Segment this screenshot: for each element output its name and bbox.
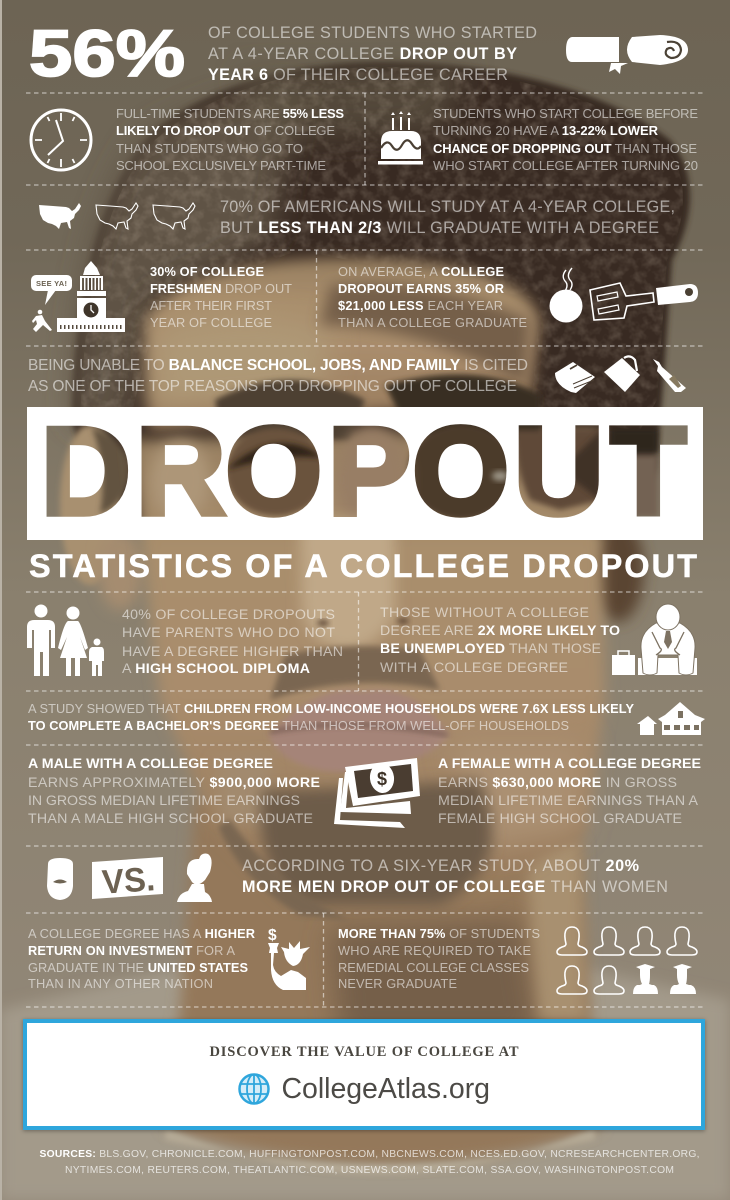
row: clock and cake statistics [31,106,698,173]
text: six-year study [242,857,668,896]
icon: small and large houses [637,702,705,735]
row: US maps and graduation [39,198,675,237]
text: female earnings [438,756,701,827]
text: 56 percent statement: OF COLLEGE STUDENTS WHO STARTED [208,24,537,42]
top block: 56 percent [29,16,688,90]
text: balance statement [28,357,528,395]
runner [38,310,42,314]
icon: statue of liberty with dollar: $ [268,927,277,944]
text: start before twenty: CHANCE OF DROPPING OUT THAN THOSE [433,141,697,156]
icon: eight student figures [557,927,697,994]
text: balance statement: AS ONE OF THE TOP REASONS FOR DROPPING OUT OF COLLEGE [28,378,517,395]
icon: woman with ponytail [177,854,212,902]
left ear [60,425,120,585]
text: male earnings: A MALE WITH A COLLEGE DEGREE [28,756,273,772]
panel: DROPOUT white title with cut-out letters [27,407,703,540]
text: unemployment: BE UNEMPLOYED THAN THOSE [380,641,601,657]
text: start before twenty: TURNING 20 HAVE A 13-22% LOWER [433,123,659,138]
icon: stack of banknotes [334,758,420,828]
row: low-income households [28,701,705,735]
text: thirty percent of freshmen: YEAR OF COLLEGE [150,315,272,330]
icon: birthday cake [378,111,423,164]
icon: burger patty and spatula [550,268,698,322]
icon: clock tower with runner: SEE YA! [36,279,67,288]
hair [72,62,690,540]
text: forty percent parents: HAVE A DEGREE HIGHER THAN [122,644,343,660]
row: balance school, jobs and family [28,356,686,395]
neck [165,800,600,1164]
text: dropout earnings: THAN A COLLEGE GRADUATE [338,315,527,330]
text: unemployment [380,605,620,676]
text: low-income study [28,701,634,733]
text: seventy percent of Americans: BUT LESS THAN 2/3 WILL GRADUATE WITH A DEGREE [220,219,659,237]
text: forty percent parents [122,607,343,677]
text: forty percent parents: 40% OF COLLEGE DROPOUTS [122,607,335,623]
heading: statistics of a college dropout: STATISTICS OF A COLLEGE DROPOUT [29,548,697,584]
row: parents and unemployment [27,604,697,677]
text: thirty percent of freshmen [150,264,292,330]
icon: VS sign: VS. [101,860,156,902]
text: forty percent parents: HAVE PARENTS WHO DO NOT [122,625,335,641]
icon: clock tower with runner [31,261,125,332]
row: men versus women [47,854,668,902]
text: dropout earnings: $21,000 LESS EACH YEAR [338,298,503,313]
forehead [145,258,540,430]
face [130,430,605,905]
icon: statue of liberty with dollar [268,927,310,990]
icon: family [27,604,104,676]
icon: globe [240,1074,268,1104]
text: dropout earnings [338,264,527,330]
text: dropout earnings: DROPOUT EARNS 35% OR [338,281,504,296]
text: seventy percent of Americans [220,198,675,237]
text: return on investment: A COLLEGE DEGREE HAS A HIGHER [28,926,255,941]
curly hair texture [80,67,683,440]
text: female earnings: A FEMALE WITH A COLLEGE DEGREE [438,756,701,772]
text: full-time students: LIKELY TO DROP OUT OF COLLEGE [116,123,335,138]
icon: bearded man [47,858,73,900]
row: freshmen and earnings [31,261,698,332]
beard [260,780,492,905]
text: remedial classes: MORE THAN 75% OF STUDENTS [338,926,540,941]
text: six-year study: MORE MEN DROP OUT OF COLLEGE THAN WOMEN [242,878,668,896]
text: unemployment: WITH A COLLEGE DEGREE [380,660,568,676]
text: remedial classes: WHO ARE REQUIRED TO TAKE [338,943,531,958]
text: remedial classes: REMEDIAL COLLEGE CLASSES [338,960,529,975]
cheek tone [450,740,585,850]
icon: diploma scroll [566,35,688,74]
text: male earnings [28,756,320,827]
text: start before twenty: STUDENTS WHO START COLLEGE BEFORE [433,106,698,121]
row: lifetime earnings by gender [28,756,701,828]
row: return on investment and remedial classes [28,926,697,994]
text: sources: SOURCES: BLS.GOV, CHRONICLE.COM, HUFFINGTONPOST.COM, NBCNEWS.COM, NCES.ED.GOV, NCRESEARCHCENTER.ORG, [40,1149,700,1160]
text: full-time students: FULL-TIME STUDENTS ARE 55% LESS [116,106,344,121]
text: female earnings: EARNS $630,000 MORE IN GROSS [438,775,677,791]
big number 56%: 56% [29,16,185,90]
lips [268,690,450,772]
right ear [592,518,644,622]
panel: CollegeAtlas call to action [25,1021,703,1128]
text: return on investment: GRADUATE IN THE UNITED STATES [28,960,248,975]
text: male earnings: IN GROSS MEDIAN LIFETIME EARNINGS [28,793,300,809]
eyebrows [215,380,365,440]
text: thirty percent of freshmen: AFTER THEIR FIRST [150,298,272,313]
text: 56 percent statement: YEAR 6 OF THEIR COLLEGE CAREER [208,66,508,84]
text: CollegeAtlas.org logo: CollegeAtlas.org [282,1073,490,1105]
text: thirty percent of freshmen: 30% OF COLLEGE [150,264,264,279]
text: male earnings: THAN A MALE HIGH SCHOOL GRADUATE [28,811,313,827]
text: low-income study: TO COMPLETE A BACHELOR'S DEGREE THAN THOSE FROM WELL-OFF HOUSEHOLDS [28,718,569,733]
text: balance statement: BEING UNABLE TO BALANCE SCHOOL, JOBS, AND FAMILY IS CITED [28,357,528,374]
eye sockets [226,428,326,516]
text: return on investment [28,926,255,991]
text: full-time students: THAN STUDENTS WHO GO TO [116,141,303,156]
icon: slumped man and briefcase [612,604,697,675]
shirt [0,970,730,1200]
text: return on investment: RETURN ON INVESTMENT FOR A [28,943,235,958]
text: 56 percent statement: AT A 4-YEAR COLLEGE DROP OUT BY [208,45,517,63]
temple and sideburn [610,429,658,453]
dashed dividers [26,93,705,1007]
icon: clock [31,110,91,170]
text: remedial classes: NEVER GRADUATE [338,976,457,991]
icon: stack of banknotes: $ [377,769,387,789]
edge strip [0,0,2,1200]
text: female earnings: MEDIAN LIFETIME EARNINGS THAN A [438,793,699,809]
text: sources: NYTIMES.COM, REUTERS.COM, THEATLANTIC.COM, USNEWS.COM, SLATE.COM, SSA.GOV, WASHINGTONPOST.COM [65,1165,674,1176]
text: forty percent parents: A HIGH SCHOOL DIPLOMA [122,661,310,677]
text: male earnings: EARNS APPROXIMATELY $900,000 MORE [28,775,320,791]
text: sources [40,1149,700,1176]
text: start before twenty [433,106,698,173]
text: 56 percent statement [208,24,537,84]
text: low-income study: A STUDY SHOWED THAT CHILDREN FROM LOW-INCOME HOUSEHOLDS WERE 7.6X LESS LIKELY [28,701,634,716]
text: seventy percent of Americans: 70% OF AMERICANS WILL STUDY AT A 4-YEAR COLLEGE, [220,198,675,216]
nose [300,520,395,650]
text: unemployment: THOSE WITHOUT A COLLEGE [380,605,589,621]
text: discover the value of college: DISCOVER THE VALUE OF COLLEGE AT [210,1044,519,1060]
text: return on investment: THAN IN ANY OTHER NATION [28,976,213,991]
text: dropout earnings: ON AVERAGE, A COLLEGE [338,264,504,279]
text: six-year study: ACCORDING TO A SIX-YEAR STUDY, ABOUT 20% [242,857,639,875]
text: full-time students [116,106,344,173]
text: start before twenty: WHO START COLLEGE AFTER TURNING 20 [433,158,698,173]
icon: three US maps [39,203,195,229]
text: thirty percent of freshmen: FRESHMEN DROP OUT [150,281,292,296]
text: unemployment: DEGREE ARE 2X MORE LIKELY TO [380,623,620,639]
text: female earnings: FEMALE HIGH SCHOOL GRADUATE [438,811,682,827]
icon: briefcase [604,356,640,392]
tower [83,261,100,275]
moustache [270,646,440,700]
icon: book [555,362,595,393]
icon: glue bottle [653,359,686,392]
text: full-time students: SCHOOL EXCLUSIVELY PART-TIME [116,158,326,173]
text: remedial classes [338,926,540,991]
